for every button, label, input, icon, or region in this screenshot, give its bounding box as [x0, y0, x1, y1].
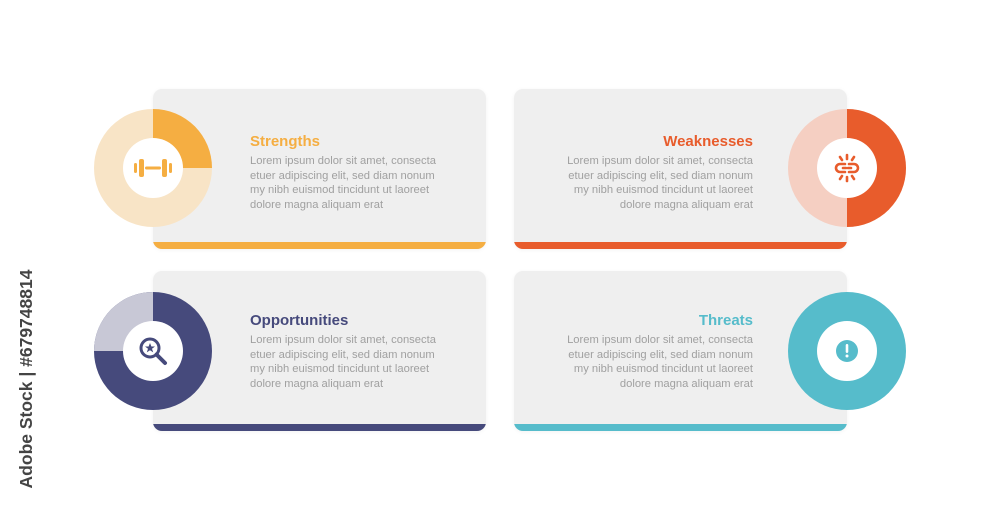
bar: opportunities: [153, 424, 486, 431]
text: weaknesses: dolore magna aliquam erat: [620, 198, 753, 210]
text: strengths: [250, 133, 436, 210]
text: opportunities: dolore magna aliquam erat: [250, 378, 383, 390]
text: threats: etuer adipiscing elit, sed diam nonum: [568, 348, 753, 360]
text: opportunities: Lorem ipsum dolor sit amet, consecta: [250, 334, 436, 346]
text: threats: Lorem ipsum dolor sit amet, consecta: [567, 334, 753, 346]
panel: weaknesses: [514, 89, 847, 249]
text: strengths: my nibh euismod tincidunt ut laoreet: [250, 184, 429, 196]
bar: weaknesses: [514, 242, 847, 249]
panel: opportunities: [153, 271, 486, 431]
text: threats: my nibh euismod tincidunt ut laoreet: [574, 363, 753, 375]
donut: threats: [788, 292, 906, 410]
text: strengths: Strengths: [250, 133, 320, 150]
donut: weaknesses: [788, 109, 906, 227]
text: opportunities: Opportunities: [250, 312, 348, 329]
text: weaknesses: [567, 133, 753, 210]
icon: magnifier with star: [141, 339, 165, 363]
text: opportunities: etuer adipiscing elit, sed diam nonum: [250, 348, 435, 360]
text: weaknesses: etuer adipiscing elit, sed diam nonum: [568, 170, 753, 182]
text: weaknesses: Lorem ipsum dolor sit amet, consecta: [567, 155, 753, 167]
icon: broken link: [836, 155, 858, 181]
text: opportunities: my nibh euismod tincidunt ut laoreet: [250, 363, 429, 375]
donut: strengths: [94, 109, 212, 227]
icon: exclamation: [836, 340, 858, 362]
bar: threats: [514, 424, 847, 431]
text: opportunities: [250, 312, 436, 390]
watermark vertical text: Adobe Stock | #679748814: [16, 270, 36, 488]
icon: dumbbell: [134, 159, 172, 177]
text: strengths: etuer adipiscing elit, sed diam nonum: [250, 170, 435, 182]
panel: threats: [514, 271, 847, 431]
text: threats: dolore magna aliquam erat: [620, 378, 753, 390]
bar: strengths: [153, 242, 486, 249]
text: strengths: dolore magna aliquam erat: [250, 198, 383, 210]
text: weaknesses: my nibh euismod tincidunt ut laoreet: [574, 184, 753, 196]
text: weaknesses: Weaknesses: [663, 133, 753, 150]
text: threats: [567, 312, 753, 390]
panel: strengths: [153, 89, 486, 249]
donut: opportunities: [94, 292, 212, 410]
text: strengths: Lorem ipsum dolor sit amet, consecta: [250, 155, 436, 167]
text: threats: Threats: [699, 312, 753, 329]
